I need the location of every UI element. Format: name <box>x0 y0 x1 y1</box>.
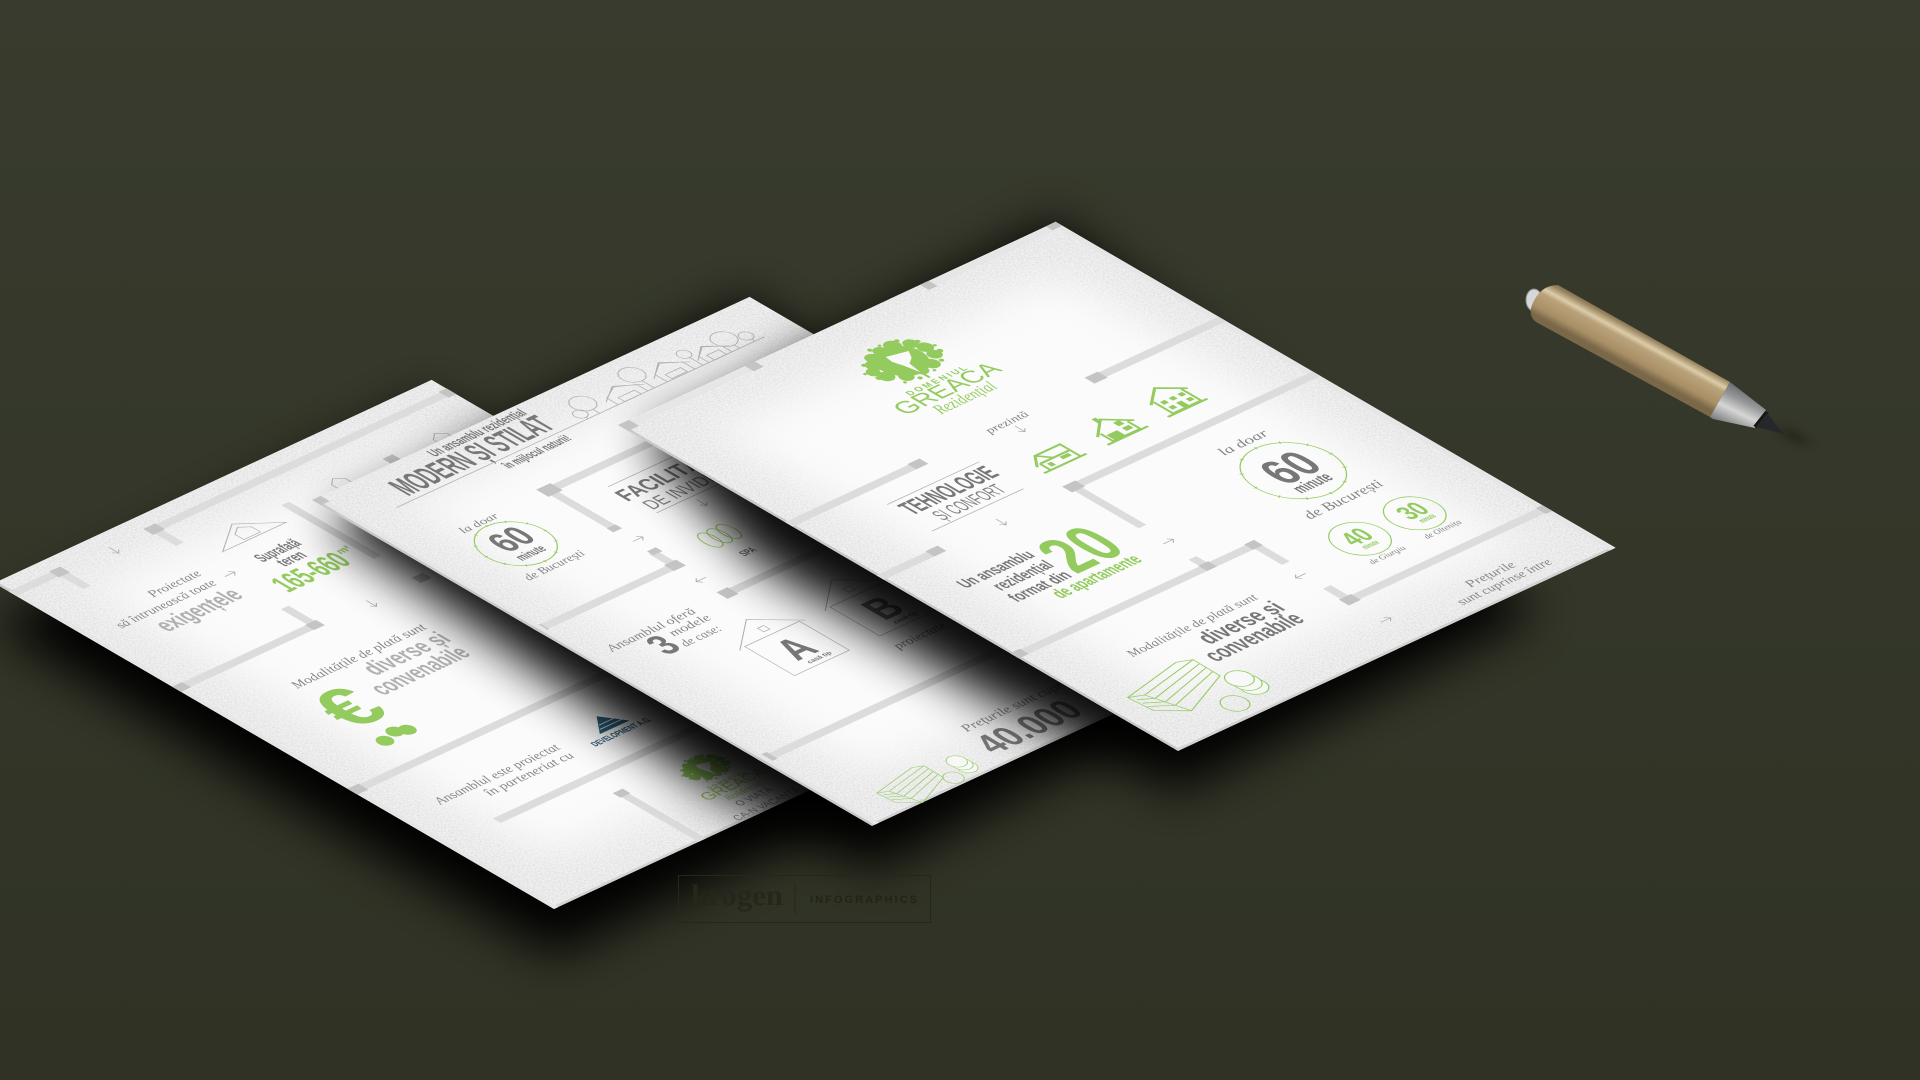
shadow: front sheet <box>643 222 1536 791</box>
pencil tip <box>1756 413 1784 434</box>
house type B: casă tip <box>891 611 920 625</box>
heading: modern și stilat: în mijlocul naturii! <box>498 433 575 471</box>
icon: coins <box>367 721 421 748</box>
watermark <box>678 876 930 922</box>
arrow <box>630 535 646 543</box>
pencil cap <box>1526 289 1542 311</box>
slogan: CA-N VACANȚĂ <box>729 785 805 822</box>
arrow <box>1377 616 1394 624</box>
statistic: 20 apartments <box>943 516 1150 622</box>
pencil body <box>1531 285 1730 417</box>
arrow <box>105 546 122 555</box>
clock: 60 minutes <box>1201 421 1389 522</box>
watermark: krogen <box>691 879 783 912</box>
land surface figures: Suprafață <box>249 536 306 565</box>
text: proiectate: proiectate <box>887 620 951 651</box>
heading: modern și stilat <box>371 406 578 509</box>
coins <box>924 753 986 786</box>
clock: 30 minutes: de Oltenița <box>1421 519 1465 541</box>
logo: greaca: Rezidențial <box>721 780 767 802</box>
pencil cone <box>1710 382 1766 428</box>
icon: spa <box>693 522 768 562</box>
text: proiectate: Proiectate <box>142 568 205 599</box>
text: payment <box>286 621 480 718</box>
heading: tehnologie și confort <box>887 462 1025 531</box>
heading: modern și stilat: MODERN ȘI STILAT <box>379 411 564 501</box>
text: partnership: în parteneriat cu <box>480 750 579 798</box>
statistic: 20 apartments: rezidențial <box>987 558 1059 593</box>
text: partnership: Ansamblul este proiectat <box>429 742 566 807</box>
logo: greaca: GREACA <box>696 766 772 803</box>
text: prices: sunt cuprinse între <box>1452 557 1556 607</box>
arrow <box>693 575 710 584</box>
icon: house small <box>1023 442 1086 473</box>
arrow <box>222 570 238 579</box>
paper <box>0 380 992 909</box>
clock: 60 minutes: la doar <box>454 511 503 535</box>
land surface figures: 165-660 <box>262 548 359 597</box>
clock: 30 minutes <box>1370 490 1470 543</box>
arrow <box>1160 537 1177 546</box>
clock: 30 minutes: 30 <box>1388 498 1437 524</box>
text: payment: convenabile <box>1197 609 1311 665</box>
shadow: back sheet <box>0 400 900 955</box>
logo: greaca <box>658 744 780 808</box>
statistic: 20 apartments: Un ansamblu <box>952 548 1040 591</box>
shadow: middle sheet <box>327 299 1200 869</box>
sheet: front <box>618 222 1616 751</box>
illustration: houses and trees <box>364 318 764 508</box>
land surface figures: m² <box>333 544 355 556</box>
logo: domeniul greaca rezidențial: GREACA <box>886 359 1009 419</box>
text: payment: convenabile <box>362 642 477 699</box>
logo: domeniul greaca rezidențial <box>825 323 1022 427</box>
icon: money stack and coins <box>1115 648 1283 735</box>
clock: 60 minutes: 60 <box>477 521 546 558</box>
structure bars <box>312 297 1310 826</box>
house type A: A <box>764 631 829 667</box>
land surface figures: teren <box>271 548 311 569</box>
clock: 60 minutes: de București <box>519 548 589 582</box>
heading: modern și stilat: Un ansamblu rezidențial <box>423 407 531 459</box>
clock: 60 minutes <box>445 505 589 583</box>
icon: money <box>868 750 989 810</box>
text: prices: Prețurile sunt cuprinse între <box>956 658 1117 734</box>
heading: tehnologie și confort: ȘI CONFORT <box>927 481 1012 523</box>
clock: 40 minutes: minute <box>1359 539 1382 551</box>
clock: 60 minutes: de București <box>1298 478 1389 522</box>
icons: small house outlines <box>326 429 458 493</box>
logo: development: DEVELOPMENT A.G. <box>589 716 654 748</box>
text: payment: Modalitățile de plată sunt <box>1121 592 1264 660</box>
text: payment: diverse și <box>354 628 458 679</box>
statistic: 20 apartments: 20 <box>1018 516 1143 583</box>
clock: 30 minutes: minute <box>1416 512 1439 524</box>
sheet: back <box>0 380 992 909</box>
land surface figures <box>235 525 372 597</box>
icon: land plot <box>200 509 286 552</box>
text: payment: Modalitățile de plată sunt <box>286 622 432 691</box>
text: three models <box>601 605 736 673</box>
icon: house large <box>1134 379 1207 417</box>
structure bars <box>618 222 1616 751</box>
house type B: B <box>851 590 916 626</box>
scene: three isometric infographic sheets and a pencil <box>0 208 1807 990</box>
text: prezintă: prezintă <box>980 409 1033 436</box>
clock: 40 minutes <box>1316 516 1415 568</box>
icon: house medium <box>1076 408 1148 445</box>
text: prices: Prețurile <box>1459 560 1521 590</box>
arrow <box>1012 424 1028 433</box>
text: three models: Ansamblul oferă <box>601 606 700 654</box>
icon: spa: SPA <box>736 546 760 558</box>
slogan <box>716 778 805 822</box>
statistic: 20 apartments: format din <box>1003 568 1077 604</box>
paper <box>618 222 1616 751</box>
heading: facilități: FACILITĂȚI <box>608 448 725 505</box>
clock: 40 minutes: 40 <box>1332 524 1381 550</box>
text: three models: de case: <box>675 623 726 648</box>
text: three models: 3 <box>636 630 691 660</box>
pencil ring <box>1755 412 1767 427</box>
logo: greaca: DOMENIUL <box>706 771 748 791</box>
text: three models: modele <box>664 612 715 638</box>
logo: domeniul greaca rezidențial: Rezidențial <box>926 379 1003 417</box>
text: payment: diverse și <box>1190 598 1292 648</box>
arrow <box>993 518 1009 526</box>
statistic: 20 apartments: de apartamente <box>1046 552 1148 602</box>
slogan: O VIAȚĂ <box>731 785 777 808</box>
clock: 60 minutes: minute <box>1287 470 1338 496</box>
text: proiectate <box>95 567 250 646</box>
paper <box>312 297 1310 826</box>
structure bars <box>7 388 992 909</box>
logo: development <box>567 704 654 748</box>
text: prices: 40.000 <box>965 695 1094 759</box>
clock: 60 minutes: la doar <box>1214 428 1274 458</box>
shadow: pencil tip <box>1775 428 1815 444</box>
house type A <box>713 604 854 679</box>
text: proiectate: să întrunească toate <box>111 578 221 630</box>
clock: 60 minutes: 60 <box>1246 444 1335 492</box>
house type B <box>798 565 939 639</box>
watermark: INFOGRAPHICS <box>810 894 917 906</box>
house type A: casă tip <box>806 651 834 665</box>
text: payment <box>1121 590 1311 685</box>
text: proiectate: exigențele <box>147 584 250 635</box>
heading: tehnologie și confort: TEHNOLOGIE <box>891 462 1006 519</box>
icon: euro: € <box>291 676 408 739</box>
arrow <box>693 498 710 507</box>
arrow <box>363 599 380 608</box>
sheet: middle <box>312 297 1310 826</box>
clock: 40 minutes: de Giurgiu <box>1367 545 1410 566</box>
text: prices <box>950 658 1156 759</box>
heading: facilități: DE INVIDIAT <box>637 464 737 513</box>
pencil <box>1526 285 1784 434</box>
logo: domeniul greaca rezidențial: DOMENIUL <box>903 365 970 397</box>
clock: 60 minutes: minute <box>512 543 550 563</box>
arrow <box>1292 571 1309 580</box>
